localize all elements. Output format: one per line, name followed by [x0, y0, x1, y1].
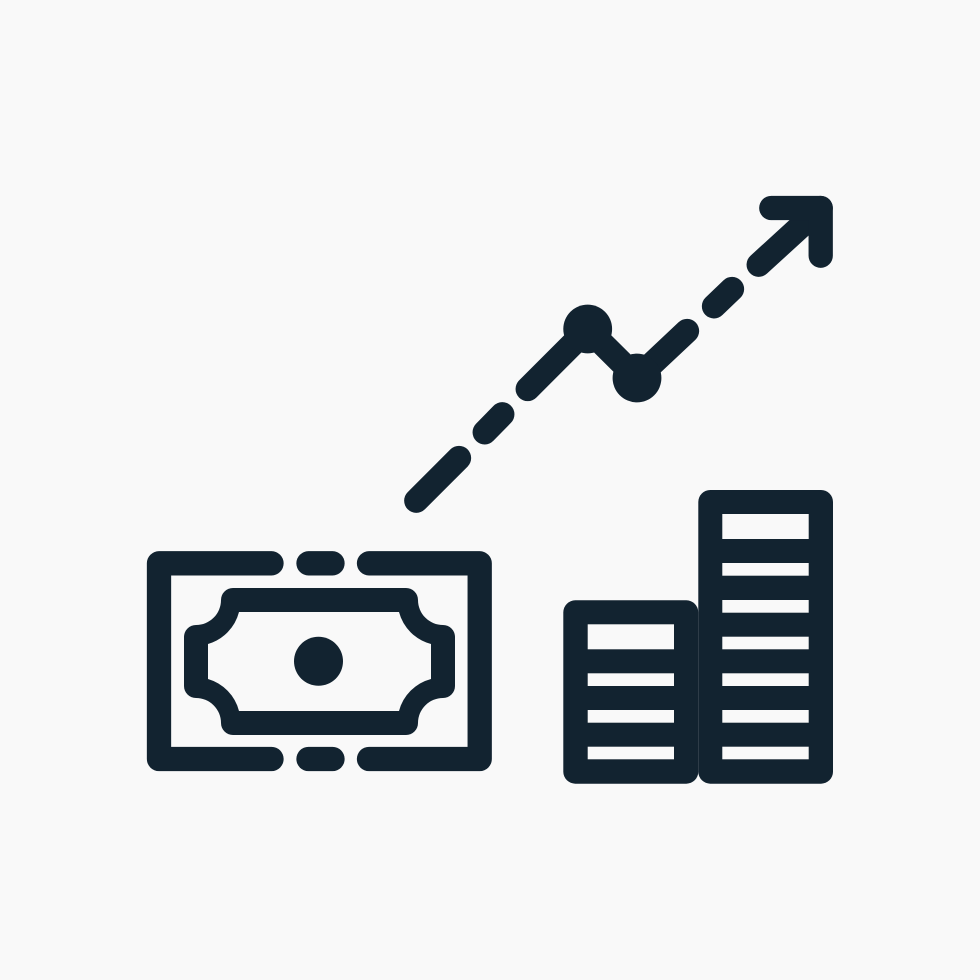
- icon: tall coin stack: [698, 490, 833, 784]
- icon: short coin stack: [563, 600, 698, 784]
- icon: banknote: [159, 563, 480, 759]
- icon: dashed rising arrow: [416, 208, 821, 501]
